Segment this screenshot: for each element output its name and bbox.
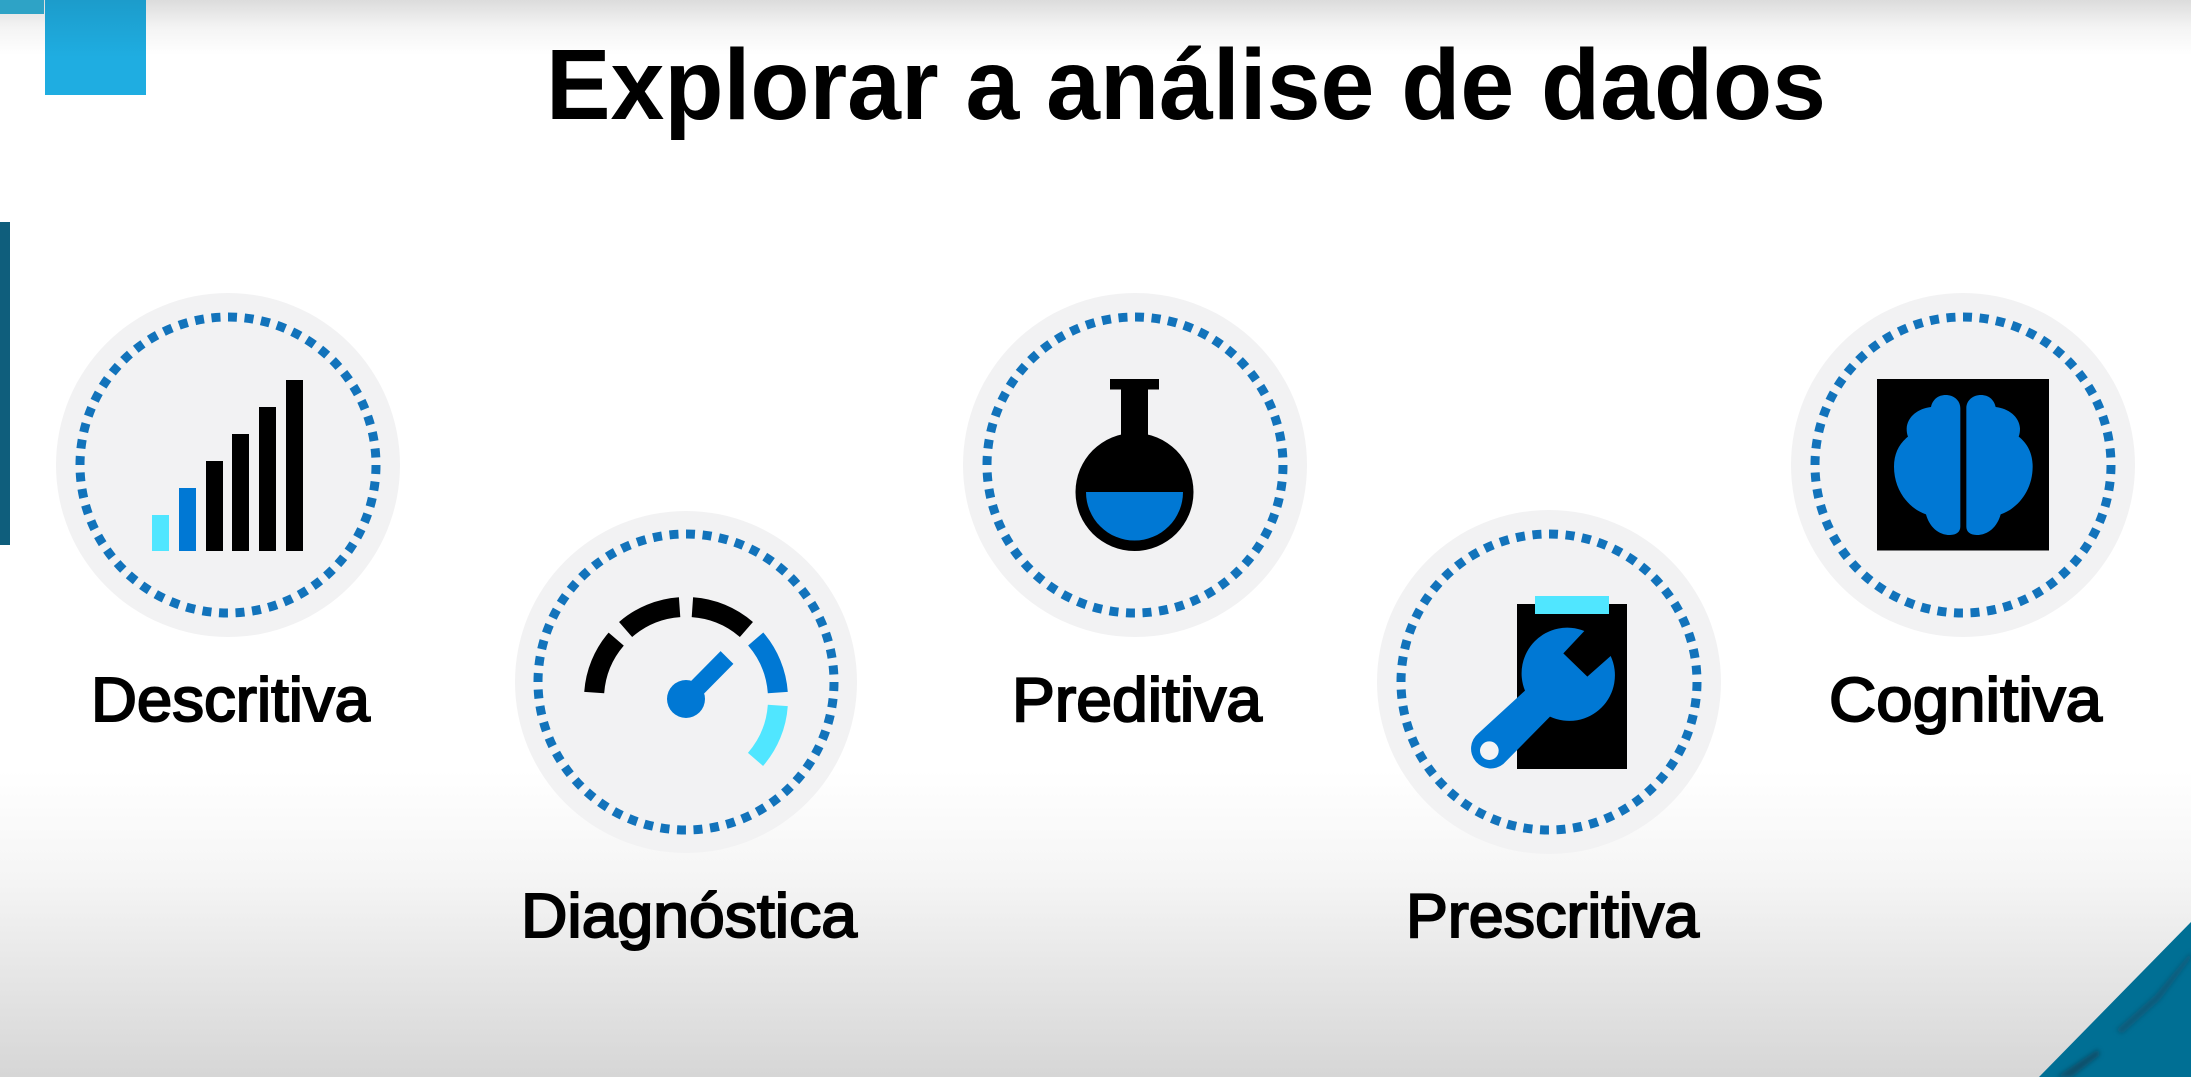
label: Preditiva bbox=[1012, 666, 1263, 735]
icon circle: bar chart bbox=[56, 293, 400, 637]
title: Explorar a análise de dados bbox=[546, 29, 1826, 141]
decorative corner squares bbox=[0, 0, 146, 95]
label: Cognitiva bbox=[1829, 666, 2103, 735]
label: Descritiva bbox=[91, 666, 371, 735]
icon circle: flask bbox=[963, 293, 1307, 637]
item: Diagnóstica bbox=[515, 511, 858, 951]
item: Preditiva bbox=[963, 293, 1307, 735]
icon circle: brain bbox=[1791, 293, 2135, 637]
icon circle: clipboard and wrench bbox=[1377, 510, 1721, 854]
item: Descritiva bbox=[56, 293, 400, 735]
label: Diagnóstica bbox=[521, 882, 858, 951]
icon circle: gauge bbox=[515, 511, 857, 853]
bottom right corner shape bbox=[2039, 922, 2191, 1077]
item: Prescritiva bbox=[1377, 510, 1721, 951]
item: Cognitiva bbox=[1791, 293, 2135, 735]
label: Prescritiva bbox=[1406, 882, 1700, 951]
left edge bar bbox=[0, 222, 10, 545]
